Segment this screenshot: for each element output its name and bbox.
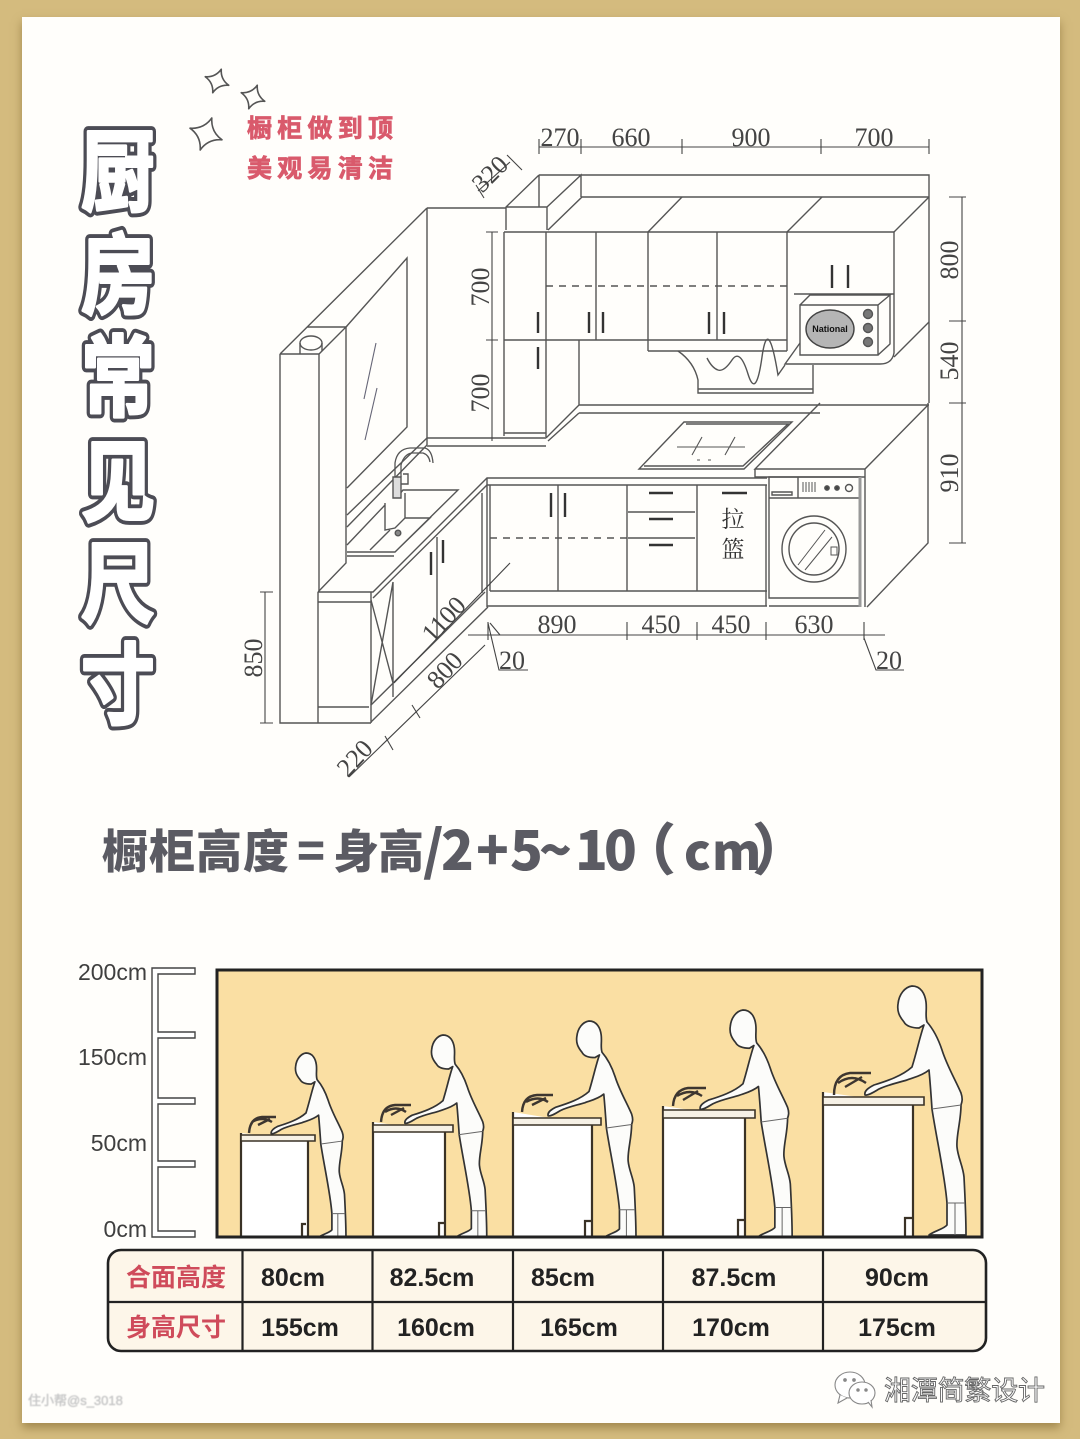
height scale: 150cm bbox=[78, 1044, 147, 1070]
row: counter height bbox=[126, 1264, 929, 1292]
icon: wechat bbox=[835, 1372, 875, 1407]
figure 5 bbox=[823, 986, 966, 1237]
dimension: top row: 320 bbox=[466, 150, 514, 198]
row: counter height: 合面高度 bbox=[126, 1264, 226, 1292]
data table bbox=[108, 1250, 986, 1351]
title bbox=[81, 101, 155, 743]
title: 见 bbox=[81, 411, 155, 540]
row: counter height: 87.5cm bbox=[692, 1264, 776, 1292]
dimension: left upper bbox=[466, 232, 498, 441]
title: 寸 bbox=[81, 614, 155, 743]
microwave: National bbox=[812, 324, 848, 334]
cabinet handles bbox=[431, 265, 848, 575]
title: 寸 bbox=[81, 614, 155, 743]
dimension: bottom row bbox=[468, 610, 904, 675]
title: 常 bbox=[81, 306, 155, 435]
base cabinets bbox=[487, 478, 767, 607]
dimension: pillar height: 850 bbox=[239, 638, 268, 678]
dimension: bottom row: 20 bbox=[876, 646, 902, 675]
dimension: right side: 800 bbox=[935, 240, 964, 280]
formula heading: /2+5~10 bbox=[423, 807, 637, 886]
row: body height: 160cm bbox=[397, 1314, 475, 1342]
red note: 美观易清洁 bbox=[247, 155, 393, 183]
row: counter height: 85cm bbox=[531, 1264, 595, 1292]
red note bbox=[247, 115, 393, 183]
sparkle stars bbox=[184, 65, 269, 156]
pull-out basket label: 篮 bbox=[722, 537, 744, 562]
row: body height: 165cm bbox=[540, 1314, 618, 1342]
title: 尺 bbox=[81, 513, 155, 642]
dimension: top row bbox=[466, 123, 929, 198]
dimension: diagonal bbox=[331, 563, 510, 782]
title: 尺 bbox=[81, 513, 155, 642]
wall and pillar bbox=[280, 208, 506, 723]
dimension: bottom row: 20 bbox=[499, 646, 525, 675]
formula heading: （ bbox=[620, 806, 676, 887]
formula heading: 橱柜高度=身高 bbox=[102, 816, 424, 882]
upper cabinets bbox=[504, 175, 929, 441]
dimension: top row: 660 bbox=[612, 123, 650, 152]
red note: 橱柜做到顶 bbox=[247, 115, 393, 143]
right counter bbox=[755, 403, 928, 607]
row: body height bbox=[126, 1314, 936, 1342]
formula heading: cm bbox=[684, 813, 761, 885]
row: counter height: 80cm bbox=[261, 1264, 325, 1292]
height scale bbox=[78, 959, 195, 1242]
dimension: pillar height bbox=[239, 592, 273, 723]
pull-out basket label bbox=[722, 507, 744, 562]
induction hob bbox=[639, 422, 792, 469]
row: counter height: 82.5cm bbox=[390, 1264, 474, 1292]
dimension: diagonal: 220 bbox=[331, 734, 379, 782]
dimension: right side: 910 bbox=[935, 454, 964, 492]
height scale: 50cm bbox=[91, 1130, 147, 1156]
pull-out basket label: 拉 bbox=[722, 507, 744, 532]
kitchen elevation drawing bbox=[239, 123, 966, 782]
figure 1 bbox=[241, 1053, 346, 1237]
source watermark: 住小帮@s_3018 bbox=[28, 1393, 123, 1408]
figure 2 bbox=[373, 1035, 487, 1237]
title: 见 bbox=[81, 411, 155, 540]
title: 房 bbox=[81, 204, 155, 333]
height scale: 200cm bbox=[78, 959, 147, 985]
chart: counter height by body height bbox=[217, 970, 982, 1238]
formula heading: ） bbox=[752, 806, 808, 887]
figure 4 bbox=[663, 1010, 792, 1237]
height scale: 0cm bbox=[104, 1216, 147, 1242]
figure 3 bbox=[513, 1021, 636, 1238]
title: 厨 bbox=[81, 101, 155, 230]
washing machine bbox=[769, 477, 860, 607]
dimension: bottom row: 450 bbox=[642, 610, 680, 639]
title: 厨 bbox=[81, 101, 155, 230]
dimension: left upper: 700 bbox=[466, 374, 495, 412]
row: body height: 170cm bbox=[692, 1314, 770, 1342]
row: body height: 身高尺寸 bbox=[126, 1314, 226, 1342]
dimension: top row: 270 bbox=[540, 123, 580, 152]
dimension: bottom row: 630 bbox=[794, 610, 834, 639]
dimension: top row: 900 bbox=[732, 123, 770, 152]
range hood bbox=[678, 339, 813, 393]
counters and sink bbox=[318, 438, 767, 723]
brand text: 湘潭简繁设计 bbox=[884, 1376, 1045, 1406]
title: 房 bbox=[81, 204, 155, 333]
row: body height: 175cm bbox=[858, 1314, 936, 1342]
row: counter height: 90cm bbox=[865, 1264, 929, 1292]
dimension: diagonal: 800 bbox=[421, 646, 469, 694]
row: body height: 155cm bbox=[261, 1314, 339, 1342]
dimension: left upper: 700 bbox=[466, 268, 495, 306]
dimension: top row: 700 bbox=[854, 123, 894, 152]
dimension: bottom row: 890 bbox=[538, 610, 576, 639]
title: 常 bbox=[81, 306, 155, 435]
microwave bbox=[800, 295, 890, 355]
dimension: bottom row: 450 bbox=[712, 610, 750, 639]
dimension: right side: 540 bbox=[935, 342, 964, 380]
dimension: right side bbox=[935, 197, 966, 543]
dimension: diagonal: 1100 bbox=[416, 591, 472, 648]
